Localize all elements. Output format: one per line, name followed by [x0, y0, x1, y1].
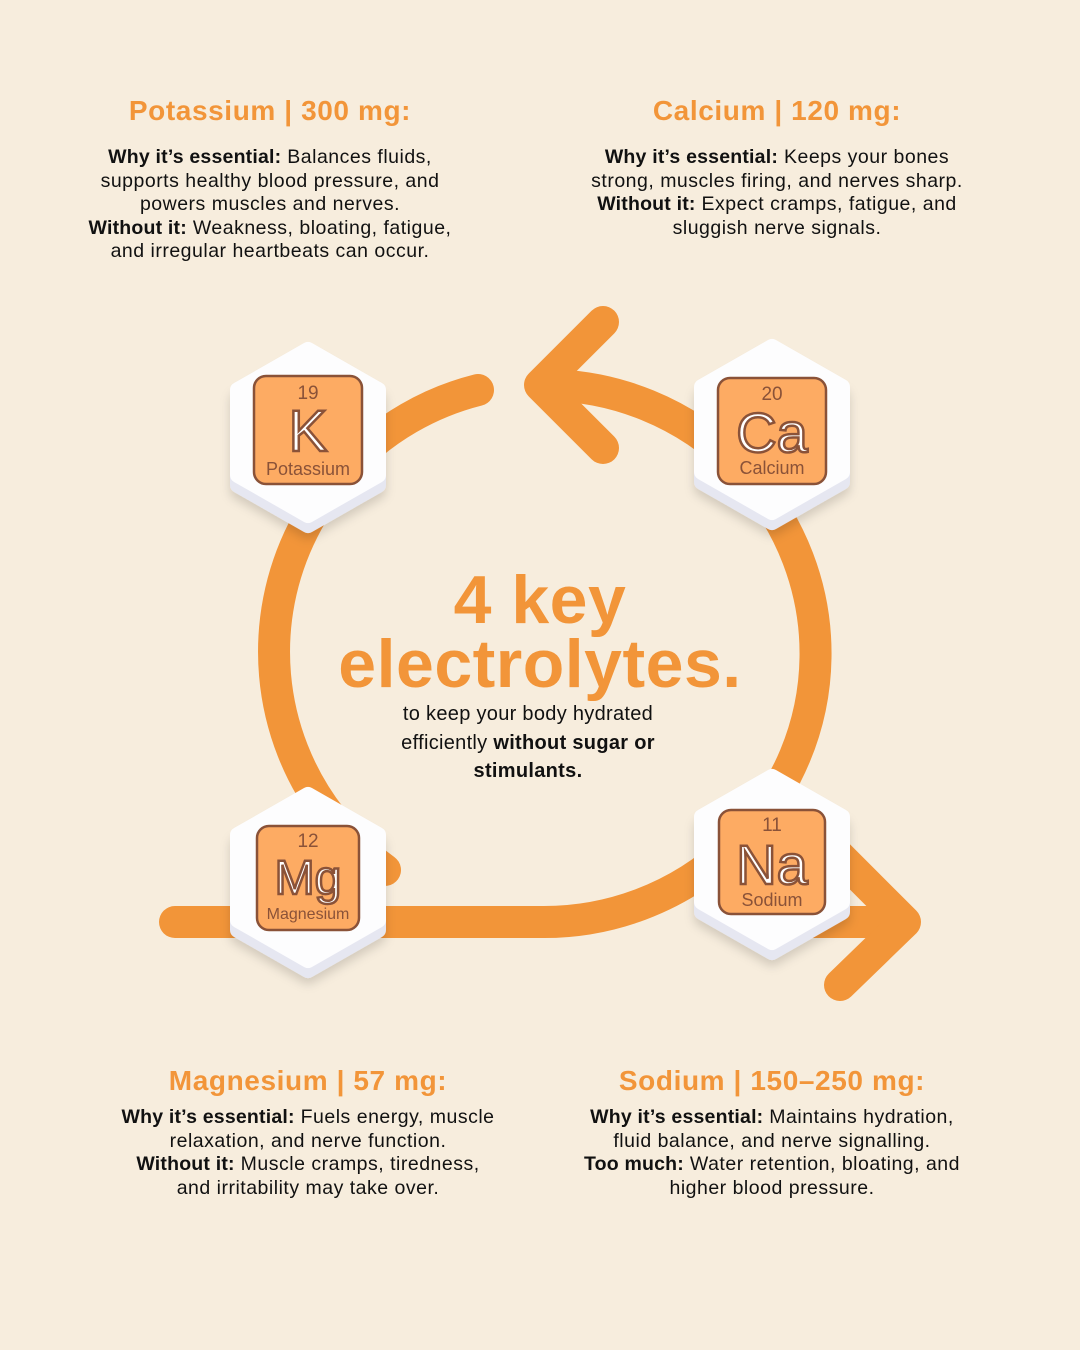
arrow: bottom-right arrowhead: [760, 855, 905, 985]
icon: sodium hexagon: Na: [736, 833, 809, 896]
body: magnesium: [121, 1106, 494, 1198]
center title: 4 key: [454, 562, 626, 638]
icon: potassium hexagon: 19: [297, 383, 319, 404]
body: sodium: higher blood pressure.: [669, 1176, 875, 1198]
arrow: right arc with top arrowhead: [175, 322, 816, 922]
body: calcium: strong, muscles firing, and nerves sharp.: [591, 170, 963, 192]
heading: sodium: Sodium | 150–250 mg:: [619, 1065, 925, 1096]
body: potassium: Why it’s essential: Balances fluids,: [108, 146, 432, 168]
icon: sodium hexagon: Sodium: [741, 890, 803, 910]
body: potassium: and irregular heartbeats can occur.: [111, 240, 429, 262]
center title: [338, 562, 742, 702]
text block: sodium: [584, 1065, 960, 1198]
body: calcium: [591, 146, 963, 238]
icon: sodium hexagon: 11: [762, 815, 782, 836]
icon: calcium hexagon: [702, 347, 842, 522]
icon: calcium hexagon: Calcium: [739, 458, 805, 478]
icon: magnesium hexagon: Magnesium: [267, 906, 349, 923]
heading: calcium: Calcium | 120 mg:: [653, 95, 901, 126]
icon: potassium hexagon: K: [289, 399, 328, 464]
center subtitle: to keep your body hydrated efficiently without sugar or stimulants.: [401, 703, 655, 782]
heading: potassium: Potassium | 300 mg:: [129, 95, 411, 126]
body: potassium: Without it: Weakness, bloating, fatigue,: [89, 216, 451, 238]
body: magnesium: and irritability may take over.: [177, 1176, 439, 1198]
arrow: left arc: [274, 390, 478, 870]
icon: potassium hexagon: [238, 350, 378, 525]
body: sodium: Why it’s essential: Maintains hydration,: [590, 1106, 954, 1128]
icon: magnesium hexagon: 12: [297, 831, 319, 852]
body: sodium: Too much: Water retention, bloating, and: [584, 1153, 960, 1175]
text block: magnesium: [121, 1065, 494, 1198]
body: potassium: supports healthy blood pressure, and: [101, 170, 439, 192]
body: sodium: fluid balance, and nerve signalling.: [613, 1130, 931, 1152]
body: magnesium: Why it’s essential: Fuels energy, muscle: [121, 1106, 494, 1128]
text block: potassium: [88, 95, 451, 262]
body: potassium: powers muscles and nerves.: [140, 193, 400, 215]
body: calcium: Without it: Expect cramps, fatigue, and: [597, 193, 957, 215]
body: calcium: sluggish nerve signals.: [673, 216, 881, 238]
body: magnesium: Without it: Muscle cramps, tiredness,: [136, 1153, 480, 1175]
heading: magnesium: Magnesium | 57 mg:: [169, 1065, 447, 1096]
icon: magnesium hexagon: Mg: [275, 852, 341, 905]
center title: electrolytes.: [338, 626, 742, 702]
icon: sodium hexagon: [702, 777, 842, 952]
body: magnesium: relaxation, and nerve function.: [170, 1130, 446, 1152]
icon: calcium hexagon: 20: [761, 384, 783, 405]
body: calcium: Why it’s essential: Keeps your bones: [605, 146, 949, 168]
icon: calcium hexagon: Ca: [736, 401, 809, 464]
text block: calcium: [591, 95, 963, 238]
icon: potassium hexagon: Potassium: [266, 459, 350, 479]
icon: magnesium hexagon: [238, 795, 378, 970]
body: potassium: [88, 146, 451, 262]
body: sodium: [584, 1106, 960, 1198]
